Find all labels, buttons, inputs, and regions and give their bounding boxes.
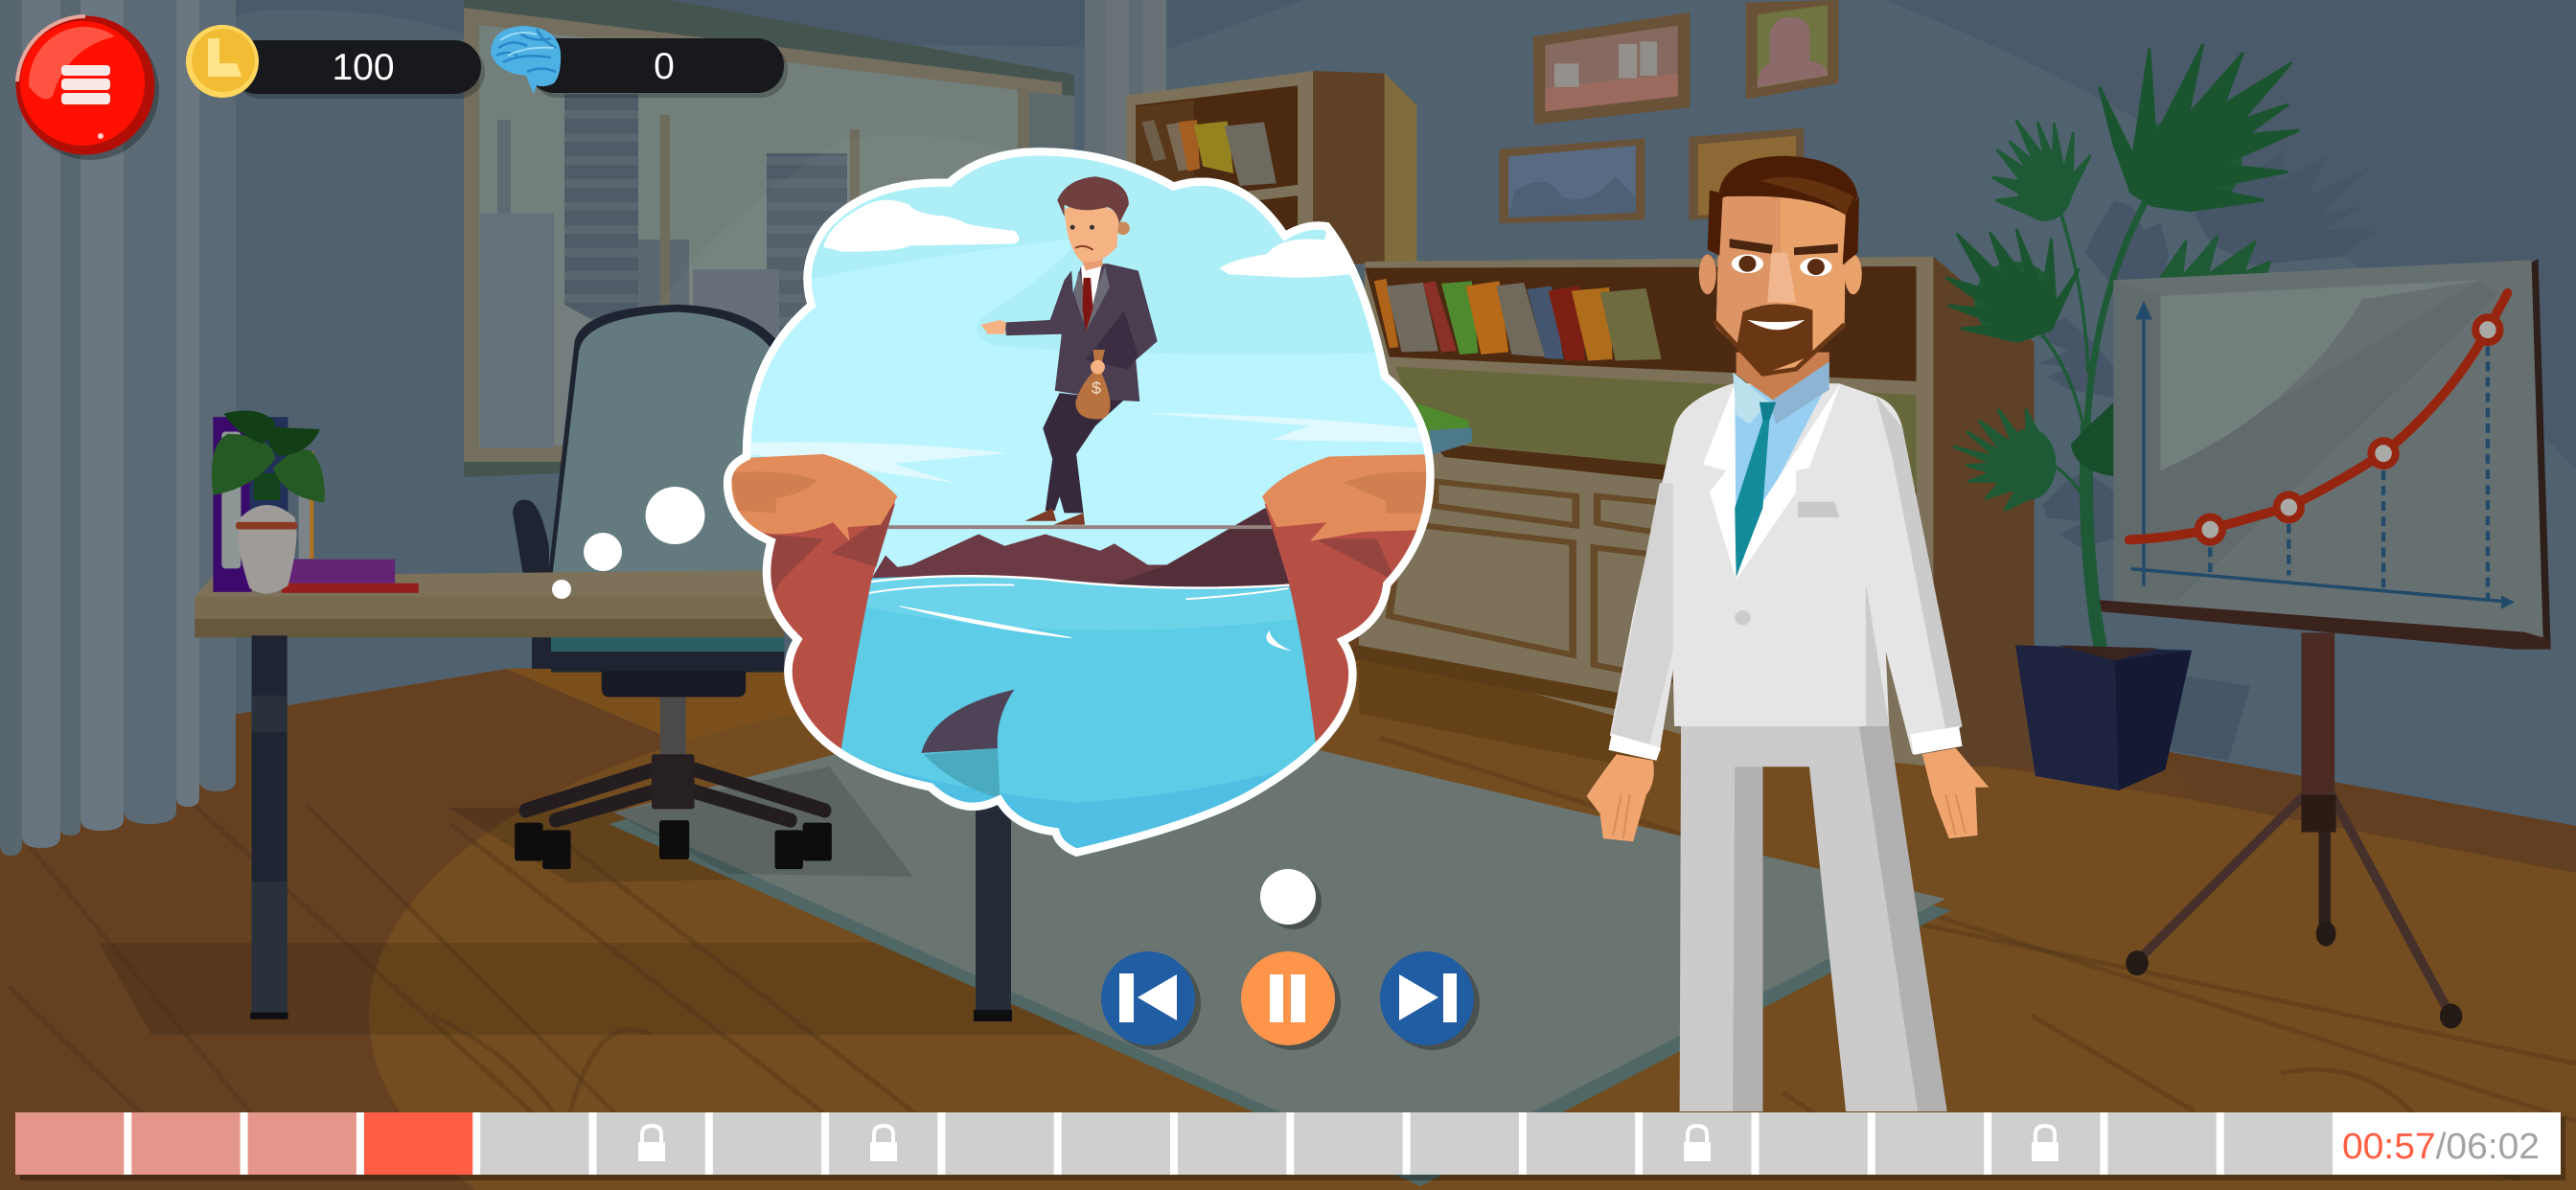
sky <box>750 148 1422 483</box>
desk, chair and desk items <box>195 305 832 1019</box>
tightrope <box>888 525 1272 529</box>
plant shadow on wall <box>2038 148 2375 547</box>
status dot <box>1260 869 1322 929</box>
chart axes <box>2131 301 2515 609</box>
picture frames <box>1500 0 1839 223</box>
potted plant and presentation board <box>1947 45 2551 1028</box>
office chair <box>513 305 832 869</box>
upcoming segments <box>480 1112 2333 1175</box>
coin score: 100 <box>332 47 395 88</box>
floor <box>0 632 2576 1190</box>
businessman on rope <box>981 176 1158 525</box>
thought bubble trail dots <box>552 487 705 599</box>
next button <box>1380 951 1480 1050</box>
binders, books and plant <box>212 411 419 594</box>
current segment <box>364 1112 472 1175</box>
hands <box>1587 748 1989 841</box>
progress timeline <box>15 1112 2565 1180</box>
mountains <box>871 509 1291 588</box>
left cliff <box>709 454 898 755</box>
pause button <box>1241 951 1341 1050</box>
thought bubble scene <box>709 134 1457 872</box>
money bag: $ <box>1092 378 1101 398</box>
brain score <box>491 26 788 98</box>
lab coat <box>1608 383 1963 761</box>
pot and stand <box>2015 632 2462 1028</box>
window <box>464 0 1074 517</box>
money bag <box>1075 350 1111 419</box>
clouds <box>823 200 1376 278</box>
top HUD <box>15 15 788 160</box>
trousers <box>1680 726 1947 1111</box>
shirt, collar and tie <box>1703 353 1841 626</box>
dashed guides <box>2210 347 2488 599</box>
coin score <box>186 25 485 99</box>
right cliff <box>1262 454 1434 752</box>
playback controls <box>1101 869 1480 1050</box>
lock icons <box>638 1126 2058 1161</box>
elapsed and total time: 00:57/06:02 <box>2342 1127 2540 1167</box>
completed segments <box>15 1112 356 1175</box>
presentation board with growth chart <box>2100 259 2551 650</box>
menu button <box>15 15 159 160</box>
lower bookcase <box>1334 257 2035 767</box>
plant <box>1947 45 2298 654</box>
desk <box>195 570 784 1019</box>
upper bookcase <box>1127 71 1416 264</box>
brain score: 0 <box>654 46 675 87</box>
growth curve <box>2129 293 2508 539</box>
bookcase and wall frames <box>1127 0 2035 767</box>
rug <box>609 692 1951 1186</box>
previous button <box>1101 951 1201 1050</box>
right curtain <box>1085 0 1166 307</box>
head <box>1699 156 1862 374</box>
sea <box>805 576 1376 872</box>
doctor character <box>1587 156 1989 1111</box>
shark fin <box>921 690 1014 798</box>
left curtain <box>0 0 236 856</box>
